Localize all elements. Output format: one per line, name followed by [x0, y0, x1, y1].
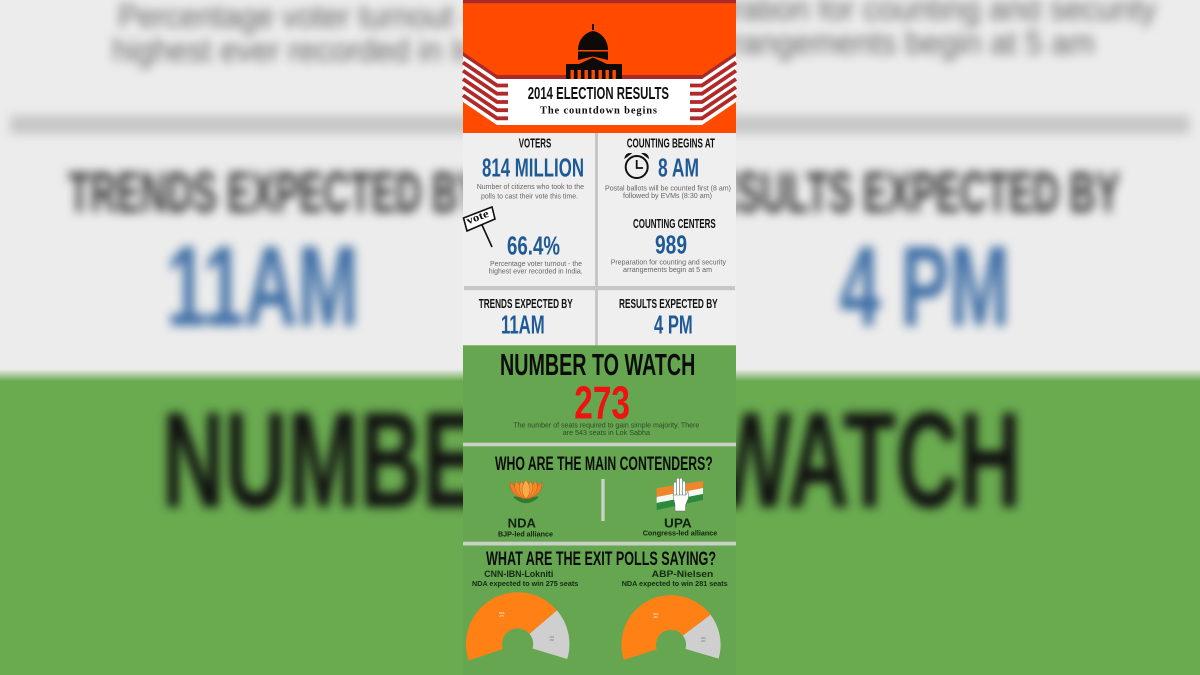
- contenders: BJP-led alliance: [498, 529, 553, 538]
- counting centers: Preparation for counting and security: [611, 257, 726, 266]
- subtitle: The countdown begins: [540, 106, 657, 116]
- number to watch: 273: [574, 376, 630, 428]
- counting centers: [611, 216, 726, 274]
- icon: capitol building: [566, 24, 622, 79]
- title: 2014 ELECTION RESULTS: [528, 83, 669, 103]
- chart: CNN-IBN-Lokniti seats: NDA: [499, 611, 505, 615]
- exit polls: NDA expected to win 275 seats: [472, 579, 578, 588]
- results: RESULTS EXPECTED BY: [619, 296, 718, 311]
- contenders: [495, 454, 717, 538]
- counting begins: COUNTING BEGINS AT: [627, 135, 715, 150]
- panel: header: [463, 0, 736, 133]
- icon: hand and flag: [657, 478, 703, 511]
- number to watch: are 543 seats in Lok Sabha: [563, 428, 651, 437]
- icon: lotus: [510, 480, 542, 513]
- counting begins: 8 AM: [658, 152, 699, 182]
- contenders: Congress-led alliance: [643, 528, 717, 537]
- contenders: UPA: [664, 516, 692, 531]
- exit polls: WHAT ARE THE EXIT POLLS SAYING?: [486, 549, 716, 570]
- chart: CNN-IBN-Lokniti seats: 275: [500, 614, 504, 618]
- counting centers: 989: [655, 230, 687, 260]
- icon: alarm clock: [625, 153, 648, 178]
- exit polls: [466, 549, 728, 660]
- voters: VOTERS: [519, 136, 551, 150]
- contenders: NDA: [508, 516, 537, 531]
- trends: [479, 296, 573, 340]
- chart: ABP-Nielsen seats: 262: [701, 639, 706, 643]
- panel: key facts: [463, 133, 736, 346]
- voters: 814 MILLION: [482, 152, 584, 182]
- banner ribbon: [463, 52, 736, 125]
- panel: green lower section: [463, 345, 736, 675]
- trends: TRENDS EXPECTED BY: [479, 296, 573, 311]
- chart: CNN-IBN-Lokniti seats: UPA: [549, 635, 555, 639]
- counting centers: arrangements begin at 5 am: [623, 265, 712, 274]
- chart: ABP-Nielsen seats: [621, 595, 721, 660]
- chart: ABP-Nielsen seats: 281: [654, 615, 658, 619]
- chart: CNN-IBN-Lokniti seats: 268: [550, 638, 554, 642]
- results: [619, 296, 718, 340]
- counting begins: followed by EVMs (8:30 am): [623, 191, 712, 200]
- icon: vote placard: [464, 207, 495, 247]
- icon: vote placard: vote: [465, 208, 491, 227]
- counting begins: [605, 135, 731, 200]
- turnout: [489, 230, 583, 276]
- blurred enlarged background: arrangements begin at 5 am: [703, 25, 1095, 62]
- blurred enlarged background: highest ever recorded in India.: [112, 32, 526, 69]
- chart: CNN-IBN-Lokniti seats: [466, 592, 569, 660]
- turnout: Percentage voter turnout - the: [490, 259, 582, 268]
- exit polls: CNN-IBN-Lokniti: [484, 569, 553, 579]
- blurred enlarged background: 4 PM: [840, 222, 1010, 350]
- trends: 11AM: [501, 310, 545, 340]
- results: 4 PM: [654, 310, 693, 340]
- chart: ABP-Nielsen seats: NDA: [653, 612, 659, 616]
- turnout: highest ever recorded in India.: [489, 267, 583, 276]
- contenders: WHO ARE THE MAIN CONTENDERS?: [495, 454, 713, 475]
- exit polls: NDA expected to win 281 seats: [622, 579, 728, 588]
- voters: [477, 136, 584, 201]
- number to watch: [500, 347, 699, 437]
- counting centers: COUNTING CENTERS: [633, 216, 716, 231]
- voters: Number of citizens who took to the: [477, 182, 584, 191]
- voters: polls to cast their vote this time.: [481, 192, 578, 201]
- blurred enlarged background: TRENDS EXPECTED BY: [68, 161, 482, 225]
- blurred enlarged background: 11AM: [166, 222, 359, 350]
- counting begins: Postal ballots will be counted first (8 am): [605, 184, 731, 193]
- turnout: 66.4%: [507, 230, 560, 260]
- number to watch: The number of seats required to gain simple majority. There: [513, 421, 699, 430]
- exit polls: ABP-Nielsen: [652, 569, 713, 579]
- number to watch: NUMBER TO WATCH: [500, 347, 695, 382]
- chart: ABP-Nielsen seats: UPA: [701, 636, 706, 640]
